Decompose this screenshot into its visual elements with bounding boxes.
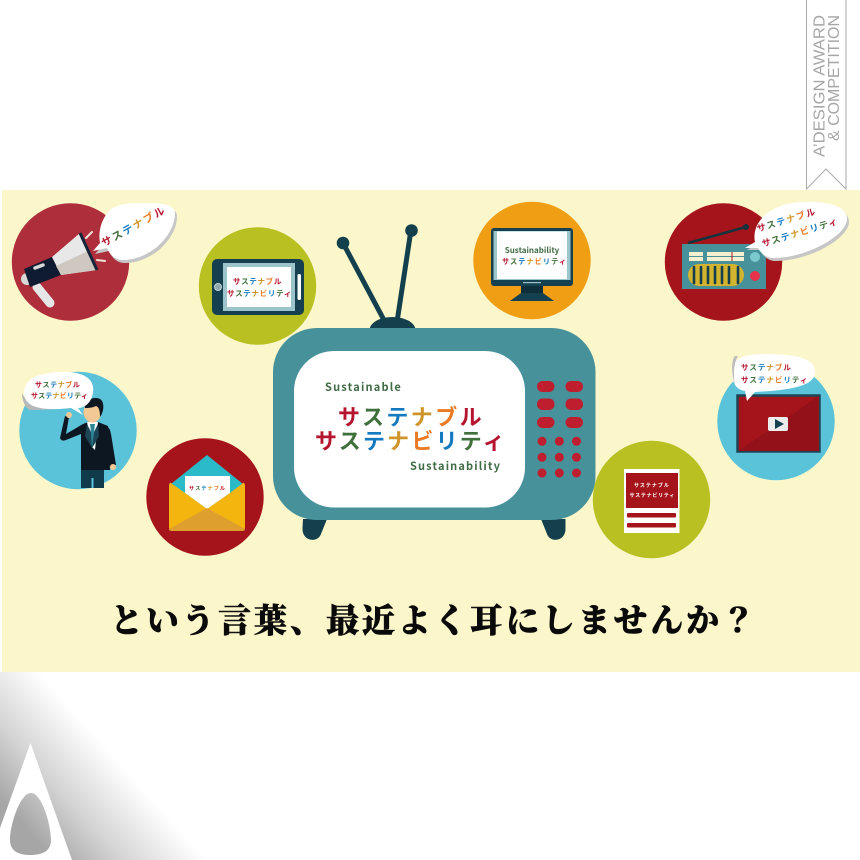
award ribbon: A’DESIGN AWARD xyxy=(812,15,828,157)
yellow background panel xyxy=(2,190,860,672)
speech bubble: businessman xyxy=(22,372,93,415)
icon: tablet circle xyxy=(199,227,316,345)
speech bubble: megaphone: サステナブル xyxy=(99,203,168,250)
tv screen text: サステナビリティ xyxy=(315,429,507,454)
icon: megaphone circle xyxy=(12,203,129,321)
icon: envelope circle xyxy=(146,438,264,556)
icon: monitor circle: サステナビリティ xyxy=(502,257,567,266)
speech bubble: businessman: サステナブル xyxy=(35,380,81,389)
tv screen text: Sustainability xyxy=(410,458,501,474)
speech bubble: radio: サステナビリティ xyxy=(760,215,840,249)
television xyxy=(273,224,596,540)
tv screen text: Sustainable xyxy=(325,379,402,395)
speech bubble: video: サステナブル xyxy=(741,362,792,372)
speech bubble: radio: サステナブル xyxy=(755,205,818,234)
antenna xyxy=(337,224,418,343)
speech bubble: video: サステナビリティ xyxy=(741,374,808,384)
icon: booklet circle: サステナブル xyxy=(634,482,670,489)
icon: monitor circle xyxy=(473,202,591,319)
tv screen xyxy=(294,351,525,508)
speech bubble: megaphone xyxy=(93,203,177,263)
tv screen text: サステナブル xyxy=(338,405,484,430)
speech bubble: radio xyxy=(745,202,849,261)
icon: monitor circle: Sustainability xyxy=(505,245,560,256)
corner logo with grey glow xyxy=(0,672,210,860)
icon: envelope circle: サステナブル xyxy=(189,484,226,492)
speech bubble: businessman: サステナビリティ xyxy=(31,391,88,400)
icon: tablet circle: サステナビリティ xyxy=(227,288,292,298)
tv screen text xyxy=(315,379,507,474)
award ribbon: & COMPETITION xyxy=(826,15,843,141)
icon: businessman circle xyxy=(19,372,137,489)
speech bubble: video xyxy=(732,354,815,401)
award ribbon xyxy=(806,0,846,189)
icon: tablet circle: サステナブル xyxy=(233,276,282,286)
icon: radio circle xyxy=(665,203,782,321)
tv feet xyxy=(302,519,566,540)
tv body xyxy=(273,328,596,520)
headline: という言葉、最近よく耳にしませんか？ xyxy=(110,595,758,642)
tv buttons xyxy=(537,381,583,478)
icon: booklet circle xyxy=(593,441,710,558)
icon: booklet circle: サステナビリティ xyxy=(630,492,675,499)
icon: video player circle xyxy=(717,363,835,480)
